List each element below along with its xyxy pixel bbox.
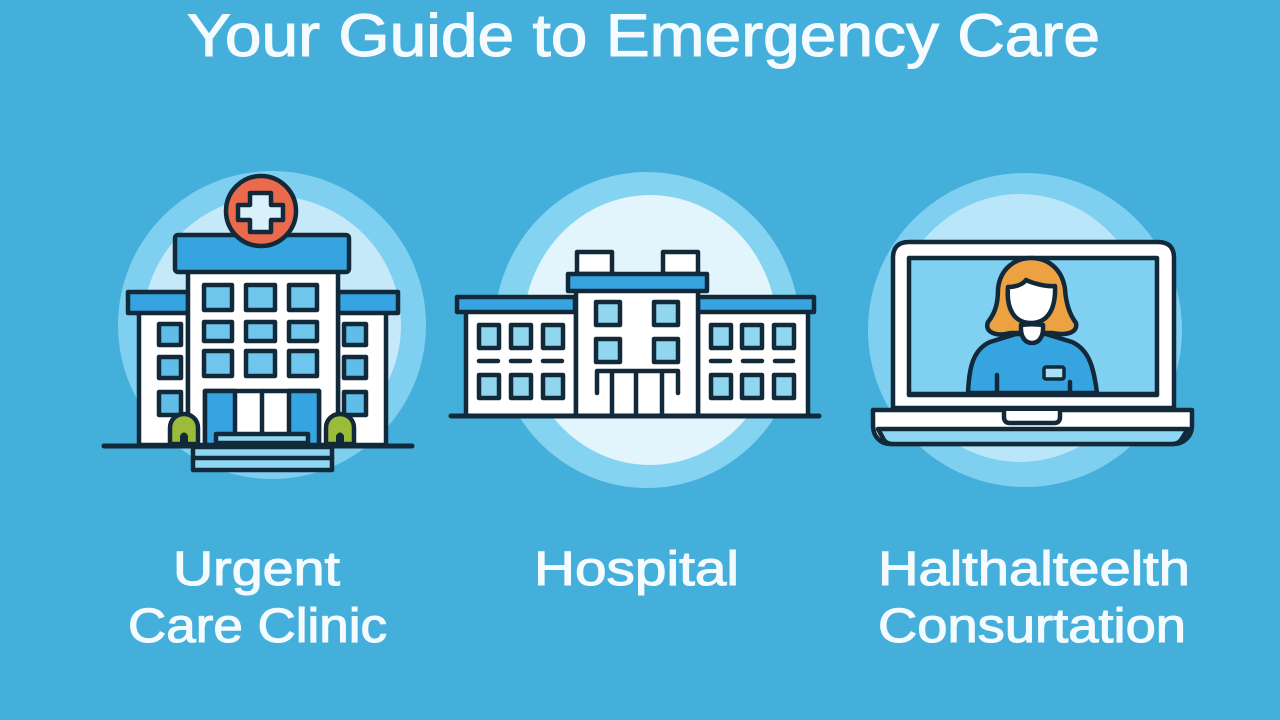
icon: hospital bbox=[451, 172, 819, 488]
title: Your Guide to Emergency Care bbox=[187, 2, 1100, 69]
label: telehealth consultation: Consurtation bbox=[878, 600, 1186, 653]
person bbox=[968, 258, 1097, 393]
icon: telehealth laptop bbox=[868, 173, 1192, 487]
label: telehealth consultation bbox=[878, 543, 1190, 653]
label: telehealth consultation: Halthalteelth bbox=[878, 543, 1190, 596]
label: hospital: Hospital bbox=[534, 543, 739, 596]
label: urgent care clinic: Urgent bbox=[173, 543, 340, 596]
label: urgent care clinic bbox=[128, 543, 387, 653]
label: urgent care clinic: Care Clinic bbox=[128, 600, 387, 653]
icon: urgent care clinic bbox=[104, 171, 426, 479]
